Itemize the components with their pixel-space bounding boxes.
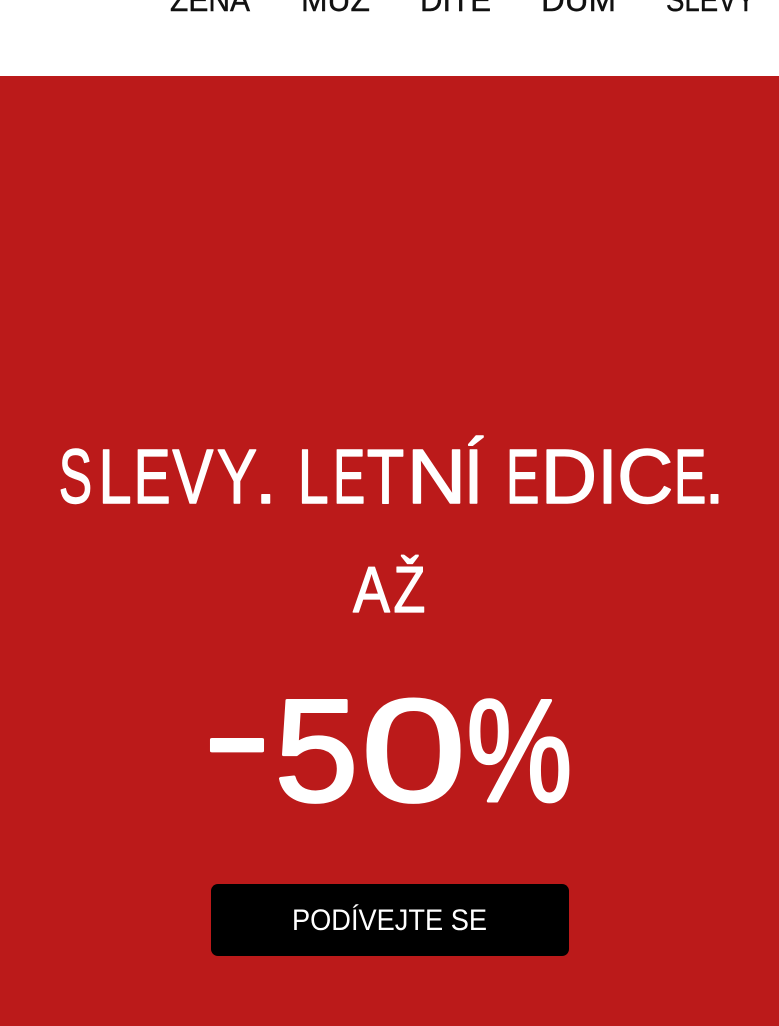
call to action button [211, 884, 569, 956]
headline: I [598, 434, 617, 520]
headline: E [134, 434, 171, 520]
discount figure: % [466, 669, 572, 832]
headline: Í [464, 434, 484, 520]
headline: E [333, 434, 365, 520]
discount figure: 0 [361, 669, 466, 832]
subheading: A [353, 553, 391, 626]
call to action button: PODÍVEJTE SE [292, 904, 487, 937]
headline: T [367, 434, 404, 520]
discount figure: 5 [274, 669, 358, 832]
headline: E [506, 434, 539, 520]
headline: N [407, 434, 466, 520]
headline: . [255, 434, 277, 520]
headline: S [59, 434, 92, 520]
navigation bar [0, 0, 779, 76]
headline: Y [217, 434, 257, 520]
subheading: Ž [393, 553, 425, 626]
discount figure: - [203, 652, 271, 815]
headline: L [98, 434, 132, 520]
headline: V [172, 434, 214, 520]
headline: D [541, 434, 597, 520]
headline: L [298, 434, 329, 520]
headline: C [617, 434, 673, 520]
headline: . [705, 434, 724, 520]
headline: E [674, 434, 706, 520]
